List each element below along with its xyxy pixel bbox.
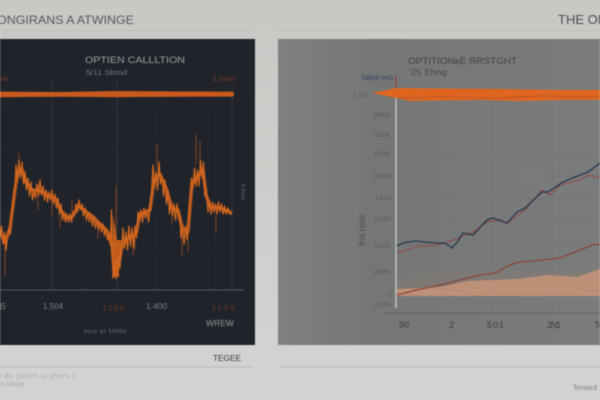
panel title: OPTITIONᴋE RRSTGHT: [408, 56, 517, 67]
y axis labels: 15000: [374, 152, 391, 158]
legend label: DBEE HIG: [362, 76, 393, 82]
y axis labels: 1000: [375, 196, 392, 202]
x axis labels: [0, 302, 234, 312]
y axis labels: 11000: [374, 217, 392, 223]
orange area: [397, 269, 600, 296]
x axis labels: 2: [449, 320, 454, 330]
x axis labels: [399, 320, 600, 330]
red upper line: [397, 175, 600, 253]
axis caption: nvvy wl 1000n: [84, 329, 126, 335]
label: tegee: TEGEE: [213, 354, 241, 363]
shaded band: [397, 271, 600, 296]
panel subtitle: '25 Ehng: [409, 68, 447, 77]
orange spike series: [0, 134, 232, 280]
panel: dark chart: [0, 39, 255, 345]
footnote right: Teroord: [573, 385, 597, 392]
panel: grey chart: [278, 39, 600, 345]
dip block: [113, 215, 122, 277]
y axis labels: [353, 93, 392, 309]
x axis line: [383, 312, 600, 314]
y axis labels: 1000n: [374, 174, 391, 180]
panel subtitle: 5/11 Sbmd: [86, 68, 127, 77]
top-right red label: 2 Dulis: [213, 77, 235, 83]
x axis labels: 1.400: [146, 302, 168, 311]
blue line: [397, 163, 600, 248]
muted orange line: [397, 282, 600, 296]
x axis labels: 1100: [212, 305, 234, 312]
orange top band: [372, 88, 600, 101]
band inner line: [396, 96, 600, 98]
y axis labels: 10000: [373, 113, 391, 119]
y axis line: [395, 95, 397, 308]
x axis labels: 2N1: [547, 320, 561, 330]
right axis rotated label: tima a: [241, 183, 247, 200]
y axis labels: 1000X: [374, 133, 390, 139]
x axis labels: 90: [399, 320, 409, 330]
y axis labels: 20000: [374, 270, 391, 276]
y axis labels: 11000: [374, 303, 392, 309]
x axis labels: 501: [487, 320, 504, 330]
x axis labels: 1.504: [43, 302, 64, 311]
x axis labels: 1100: [103, 305, 124, 312]
y axis labels: 1.00: [353, 93, 368, 99]
y axis labels: 1: [388, 293, 392, 299]
footnote left: [0, 374, 77, 388]
legend tick: [395, 75, 397, 87]
footnote left: 0.Bs ybdhfi oj yhars 5: [0, 374, 77, 380]
y axis rotated label: fris rolic: [357, 213, 367, 246]
x axis: [0, 289, 244, 291]
orange top bar: [0, 91, 234, 97]
red lower line: [397, 244, 600, 295]
panel title: OPTIEN CALLLTION: [85, 55, 185, 65]
heading: left header: ONGIRANS A ATWINGE: [0, 13, 134, 27]
y axis labels: 1000: [374, 244, 391, 250]
panel label: week: WREW: [206, 319, 234, 328]
